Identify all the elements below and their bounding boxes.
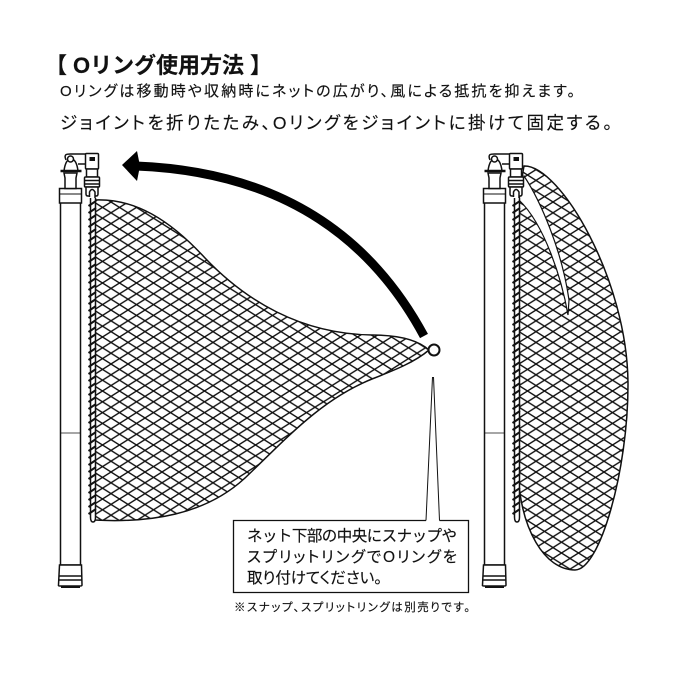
spread net: [94, 200, 429, 521]
right diagram: pole with folded net: [482, 154, 628, 587]
fold gap: [519, 176, 569, 315]
callout box: スプリットリングでOリングを: [247, 548, 457, 566]
pole right: [482, 154, 524, 587]
arrow: [122, 151, 424, 336]
rope right: [512, 198, 520, 522]
callout box: [234, 377, 468, 592]
O-ring: [428, 344, 440, 356]
callout box: ネット下部の中央にスナップや: [247, 527, 457, 545]
title: 【 Oリング使用方法 】: [45, 53, 272, 78]
footnote: ※スナップ、スプリットリングは別売りです。: [234, 600, 470, 614]
instruction text: ジョイントを折りたたみ、Oリングをジョイントに掛けて固定する。: [60, 113, 612, 133]
rope left: [88, 198, 96, 522]
subtitle text: Oリングは移動時や収納時にネットの広がり、風による抵抗を抑えます。: [60, 83, 575, 100]
callout box: 取り付けてください。: [247, 569, 382, 587]
left diagram: pole with spread net: [58, 154, 440, 587]
folded net: [518, 166, 628, 570]
pole left: [58, 154, 100, 587]
